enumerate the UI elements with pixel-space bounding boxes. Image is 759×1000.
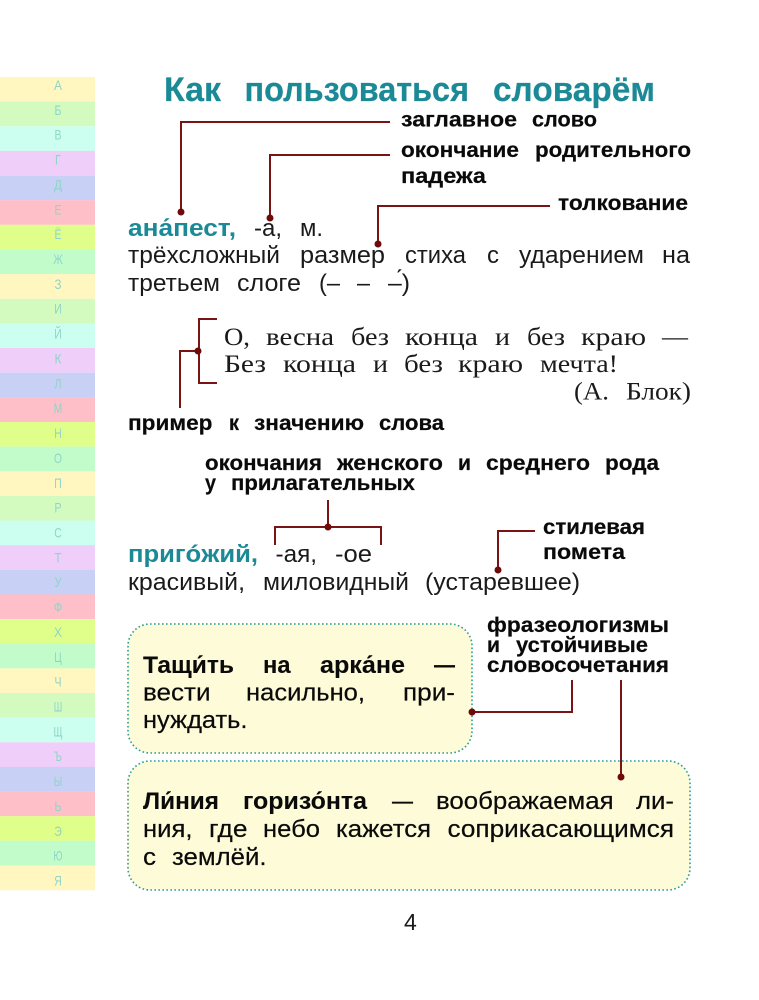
label: окончания женского и среднего рода: рода [605,452,659,475]
label: окончания женского и среднего рода: среднего [486,452,590,475]
entry: анапест: на [662,242,691,269]
label: пример к значению слова: значению [254,412,364,435]
panel: Тащить на аркане: на [263,652,291,679]
title [164,71,655,109]
panel: Линия горизонта: небо [263,816,320,843]
alphabet sidebar: О [54,450,62,466]
panel: Тащить на аркане: вести [143,680,210,706]
poem quote: краю [458,351,523,378]
poem quote: весна [266,324,334,351]
label: фразеологизмы [487,614,669,677]
entry: анапест: (– [319,270,341,297]
poem quote: О, [224,324,250,351]
alphabet sidebar: С [54,524,62,540]
label: окончание родительного падежа [401,139,691,188]
alphabet sidebar: Г [55,152,61,168]
label: окончания женского и среднего рода: у [205,472,216,495]
alphabet sidebar: Ф [54,599,62,615]
panel: Линия горизонта: с [143,844,156,871]
entry: анапест: –́) [388,269,410,297]
label: окончания женского и среднего рода: и [458,452,471,475]
poem quote: без [527,324,565,351]
alphabet sidebar: Ъ [54,748,62,764]
label: фразеологизмы: устойчивые [516,634,648,657]
leader: фразеологизмы to box 1 [468,680,572,716]
entry: анапест: слоге [237,270,301,297]
leader: фразеологизмы to box 2 [618,680,624,780]
panel: Линия горизонта: ли- [636,788,674,815]
alphabet sidebar: Х [54,624,63,640]
label: фразеологизмы: фразеологизмы [487,614,669,637]
label: заглавное слово: слово [532,108,597,132]
entry: анапест [128,215,691,297]
alphabet sidebar: Ц [54,649,62,665]
entry: анапест: -а, [254,215,282,242]
label: окончание родительного падежа: родительного [535,139,691,162]
label: окончание родительного падежа: окончание [401,139,519,162]
alphabet sidebar: В [54,127,62,143]
leader: толкование [374,206,550,248]
entry: анапест: стиха [405,242,467,269]
poem quote: — [661,324,689,351]
alphabet sidebar: Т [54,549,62,565]
poem quote: и [495,324,510,351]
page number: 4 [404,909,417,935]
poem quote: без [351,324,389,351]
alphabet sidebar: Б [54,102,62,118]
entry: пригожий: пригóжий, [128,541,258,568]
alphabet sidebar: Щ [54,723,62,739]
alphabet sidebar: У [54,574,62,590]
panel: Тащить на аркане: при- [403,680,455,706]
poem quote: Без [224,351,266,378]
bracket: poem [180,319,217,408]
title: Как [164,71,222,109]
alphabet sidebar: Ы [54,773,62,789]
alphabet sidebar: А [54,77,63,93]
entry: анапест: – [357,270,371,297]
entry: анапест: м. [300,215,323,242]
alphabet sidebar: Л [54,375,62,391]
label: стилевая помета: стилевая [543,516,645,539]
alphabet sidebar: Д [54,176,62,192]
leader: окончание [266,155,390,222]
alphabet sidebar: Н [54,425,62,441]
entry: анапест: размер [300,242,385,269]
label: пример к значению слова: к [229,412,239,435]
label: окончания женского и среднего рода: прилагательных [231,472,415,495]
entry: пригожий: -ая, [276,541,317,568]
label: фразеологизмы: словосочетания [487,654,669,677]
poem quote: конца [405,324,478,351]
panel: Линия горизонта [128,761,690,890]
poem quote [224,324,691,406]
poem quote: мечта! [540,351,618,378]
panel: Линия горизонта: воображаемая [436,788,614,815]
bracket: окончания [275,500,381,545]
entry: пригожий: (устаревшее) [425,569,580,596]
alphabet sidebar: Ё [54,226,62,242]
leader: заглавное слово [178,122,390,216]
panel: Линия горизонта: где [209,816,248,843]
alphabet sidebar: Й [54,325,62,342]
title: словарём [493,71,655,109]
entry: пригожий: миловидный [263,569,409,596]
entry: пригожий: красивый, [128,569,245,596]
alphabet sidebar: И [54,301,62,317]
alphabet sidebar: Ь [54,798,62,814]
poem quote: (А. [574,378,609,406]
alphabet sidebar: Е [54,201,62,217]
label: пример к значению слова: слова [379,412,444,435]
panel: Тащить на аркане: арка́не [320,652,405,679]
panel: Линия горизонта: кажется [336,816,431,843]
alphabet sidebar: Я [54,872,62,888]
panel: Линия горизонта: горизо́нта [243,788,368,815]
label: окончание родительного падежа: падежа [401,165,486,188]
alphabet sidebar: Р [54,500,62,516]
alphabet sidebar: Ш [54,698,62,714]
leader: стилевая помета [494,531,535,574]
label: заглавное слово [401,108,597,132]
entry: анапест: ана́пест, [128,215,236,242]
panel: Тащить на аркане: насильно, [246,680,365,706]
panel: Тащить на аркане: Тащи́ть [143,652,234,679]
alphabet sidebar: З [54,276,62,292]
poem quote: краю [581,324,646,351]
alphabet sidebar: Ч [54,674,62,690]
entry: пригожий: -ое [335,541,372,568]
panel: Тащить на аркане [128,624,472,753]
label: окончания женского и среднего рода: женского [336,452,443,475]
label: толкование: толкование [558,192,688,215]
panel: Линия горизонта: землёй. [172,844,266,871]
poem quote: без [404,351,443,378]
entry: пригожий [128,541,580,596]
alphabet sidebar: Ю [54,848,62,864]
label: заглавное слово: заглавное [401,108,517,132]
panel: Линия горизонта: Ли́ния [143,788,219,815]
alphabet sidebar: М [54,400,62,416]
label: пример к значению слова: пример [128,412,212,435]
label: стилевая помета [543,516,645,564]
label: окончания женского и среднего рода [205,452,659,495]
alphabet sidebar: К [54,350,62,366]
panel: Линия горизонта: соприкасающимся [448,816,674,843]
panel: Линия горизонта: ния, [143,816,192,843]
label: фразеологизмы: и [487,634,500,657]
entry: анапест: ударением [519,242,644,269]
entry: анапест: третьем [128,270,220,297]
title: пользоваться [244,71,469,109]
label: стилевая помета: помета [543,541,625,564]
label: окончания женского и среднего рода: окончания [205,452,322,475]
poem quote: Блок) [626,378,691,406]
label: пример к значению слова [128,412,444,435]
panel: Тащить на аркане: нуждать. [143,707,248,734]
poem quote: конца [283,351,356,378]
alphabet sidebar: П [54,475,62,491]
alphabet sidebar [0,77,95,890]
entry: анапест: трёхсложный [128,242,280,269]
panel: Тащить на аркане: — [434,652,455,679]
alphabet sidebar: Ж [53,251,63,267]
entry: анапест: с [487,242,499,269]
panel: Линия горизонта: — [392,788,413,815]
poem quote: и [373,351,388,378]
alphabet sidebar: Э [54,823,62,839]
